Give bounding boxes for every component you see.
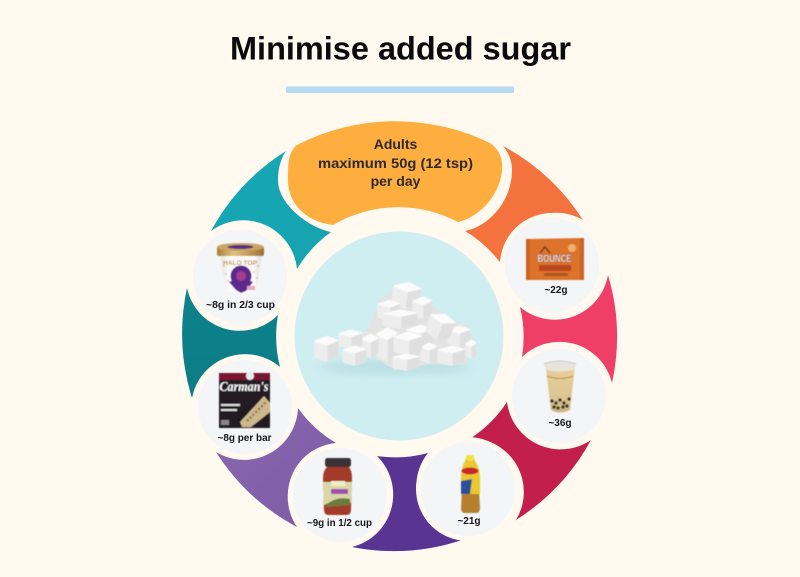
title underline (286, 86, 514, 93)
segment: dark teal (182, 288, 280, 398)
panel: adults daily maximum (288, 121, 502, 225)
item: bubble tea (507, 344, 611, 448)
label: iced tea sugar: ~21g (457, 516, 481, 527)
item: iced tea bottle (416, 437, 520, 541)
segment: orange (465, 146, 583, 265)
item: muesli bar box (193, 355, 297, 459)
icon: bounce packet: BOUNCE (538, 253, 572, 265)
icon: sugar cube pile (314, 280, 477, 374)
segment: teal (211, 151, 331, 269)
heading: adults: Adults (374, 136, 417, 152)
icon: pasta sauce jar (323, 458, 352, 515)
title: Minimise added sugar (230, 30, 571, 66)
segment: dark purple (352, 453, 462, 551)
icon: ice cream tub: HALO TOP (223, 260, 258, 267)
item: ice cream tub (188, 225, 292, 329)
segment: pink (520, 275, 617, 383)
label: bounce sugar: ~22g (544, 285, 568, 296)
text: per day: per day (371, 173, 421, 189)
segment: crimson (471, 402, 591, 520)
label: ice cream sugar: ~8g in 2/3 cup (206, 300, 275, 311)
segment: light purple (216, 408, 336, 527)
icon: bubble tea cup (544, 361, 576, 412)
centre circle with sugar cubes (294, 232, 504, 440)
text: maximum amount: maximum 50g (12 tsp) (318, 155, 473, 171)
ring: sugar wheel segments (182, 146, 617, 551)
icon: iced tea bottle (461, 455, 480, 513)
label: pasta sauce sugar: ~9g in 1/2 cup (307, 518, 372, 529)
icon: muesli bar box: Carman's (220, 380, 269, 395)
label: muesli bar sugar: ~8g per bar (218, 433, 272, 444)
item: snack ball packet (500, 213, 604, 317)
label: bubble tea sugar: ~36g (548, 418, 572, 429)
item: pasta sauce jar (288, 443, 392, 547)
